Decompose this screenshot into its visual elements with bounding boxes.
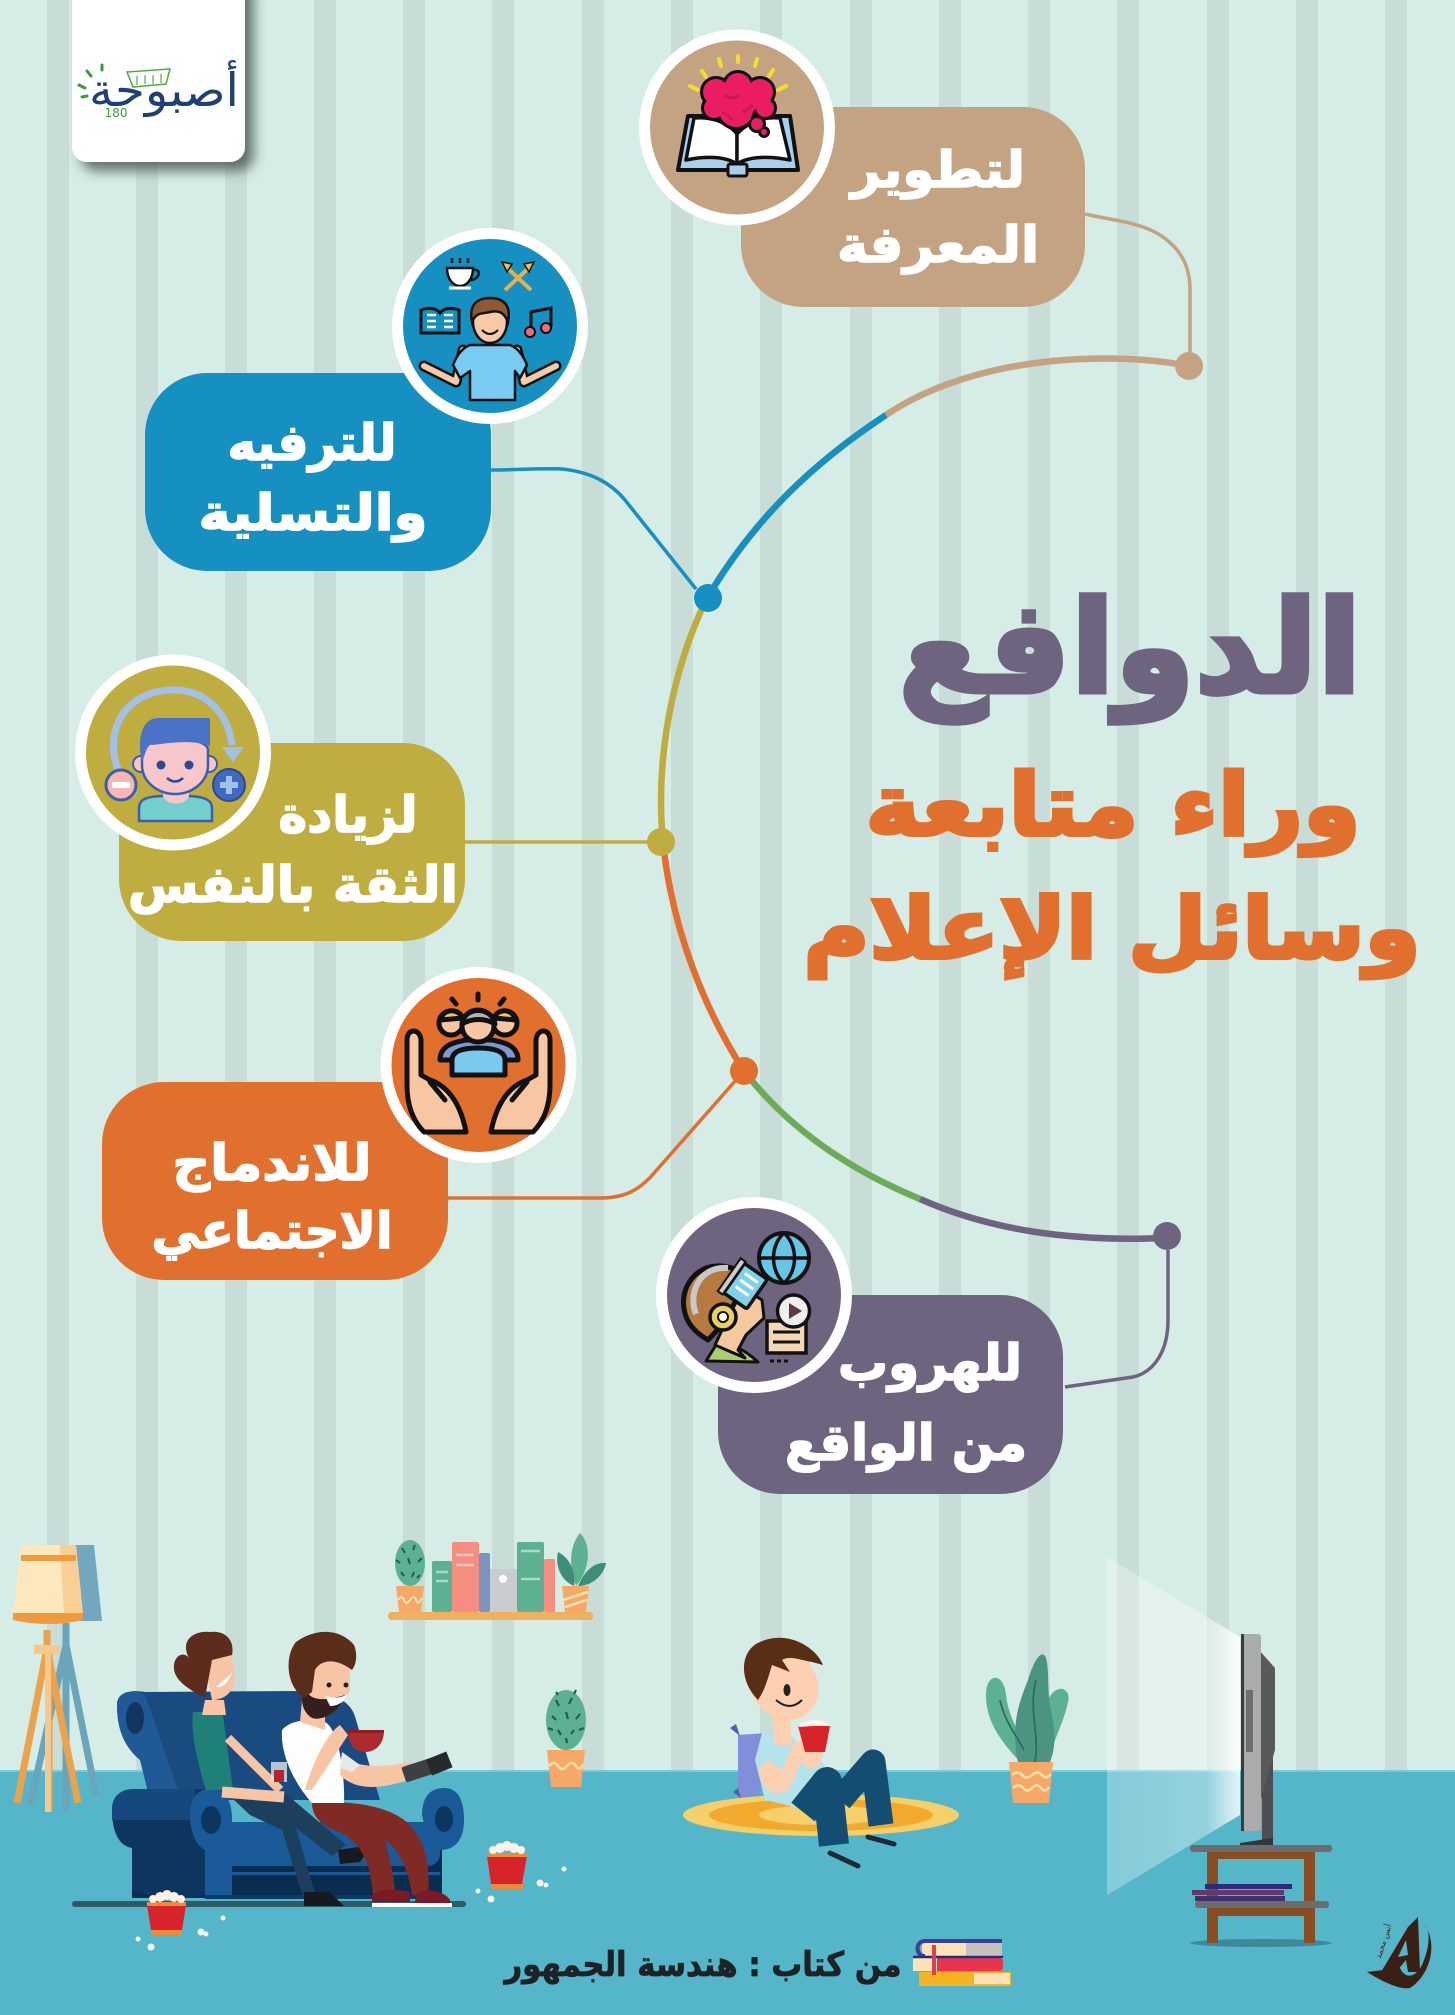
panel: social integration: للاندماج xyxy=(172,1134,372,1192)
logo wordmark: أصبوحة xyxy=(89,60,239,118)
panel: escape from reality xyxy=(662,1202,1181,1494)
sofa with two men xyxy=(72,1632,466,1907)
panel: self confidence: الثقة بالنفس xyxy=(128,856,458,914)
standing cactus xyxy=(546,1690,586,1787)
boy on a rug xyxy=(683,1638,959,1866)
icon: brain and book xyxy=(644,35,830,220)
source line: من كتاب : هندسة الجمهور xyxy=(503,1945,902,1985)
panel: social integration xyxy=(102,972,758,1280)
man in white shirt xyxy=(282,1632,453,1907)
title: وسائل الإعلام xyxy=(804,880,1420,979)
logo wordmark: 180 xyxy=(105,106,127,120)
author mark: أنس محمد xyxy=(1373,1923,1393,1959)
panel: escape from reality: من الواقع xyxy=(785,1414,1027,1473)
motivation arc xyxy=(661,358,1189,1239)
icon: stack of books xyxy=(913,1941,1011,1986)
television on a stand xyxy=(1190,1634,1332,1947)
panel: social integration: الاجتماعي xyxy=(152,1202,392,1260)
panel: entertainment: للترفيه xyxy=(228,414,396,473)
light beam from tv xyxy=(1107,1557,1240,1895)
man in green shirt xyxy=(174,1632,372,1906)
icon: relaxed man with hobbies xyxy=(398,234,582,418)
panel: self confidence xyxy=(80,660,675,941)
panel: develop knowledge: لتطوير xyxy=(848,141,1025,200)
popcorn bucket right xyxy=(476,1841,566,1902)
icon: confident boy xyxy=(80,660,266,845)
wall shelf with books and plants xyxy=(388,1533,606,1620)
popcorn bucket left xyxy=(136,1890,226,1950)
tv table xyxy=(1190,1845,1332,1947)
icon: virtual reality user xyxy=(662,1202,846,1388)
title xyxy=(804,574,1420,979)
panel: develop knowledge xyxy=(644,35,1203,380)
panel: entertainment xyxy=(145,234,722,612)
title: وراء متابعة xyxy=(866,756,1360,856)
title: الدوافع xyxy=(898,574,1362,724)
panel: escape from reality: للهروب xyxy=(838,1334,1022,1393)
icon: hands holding people xyxy=(386,972,571,1158)
panel: entertainment: والتسلية xyxy=(198,484,428,543)
logo card xyxy=(72,0,245,162)
potted plant xyxy=(986,1654,1069,1803)
panel: self confidence: لزيادة xyxy=(278,786,418,845)
panel: develop knowledge: المعرفة xyxy=(837,216,1039,275)
author mark xyxy=(1367,1917,1431,1988)
floor lamp xyxy=(13,1545,102,1812)
